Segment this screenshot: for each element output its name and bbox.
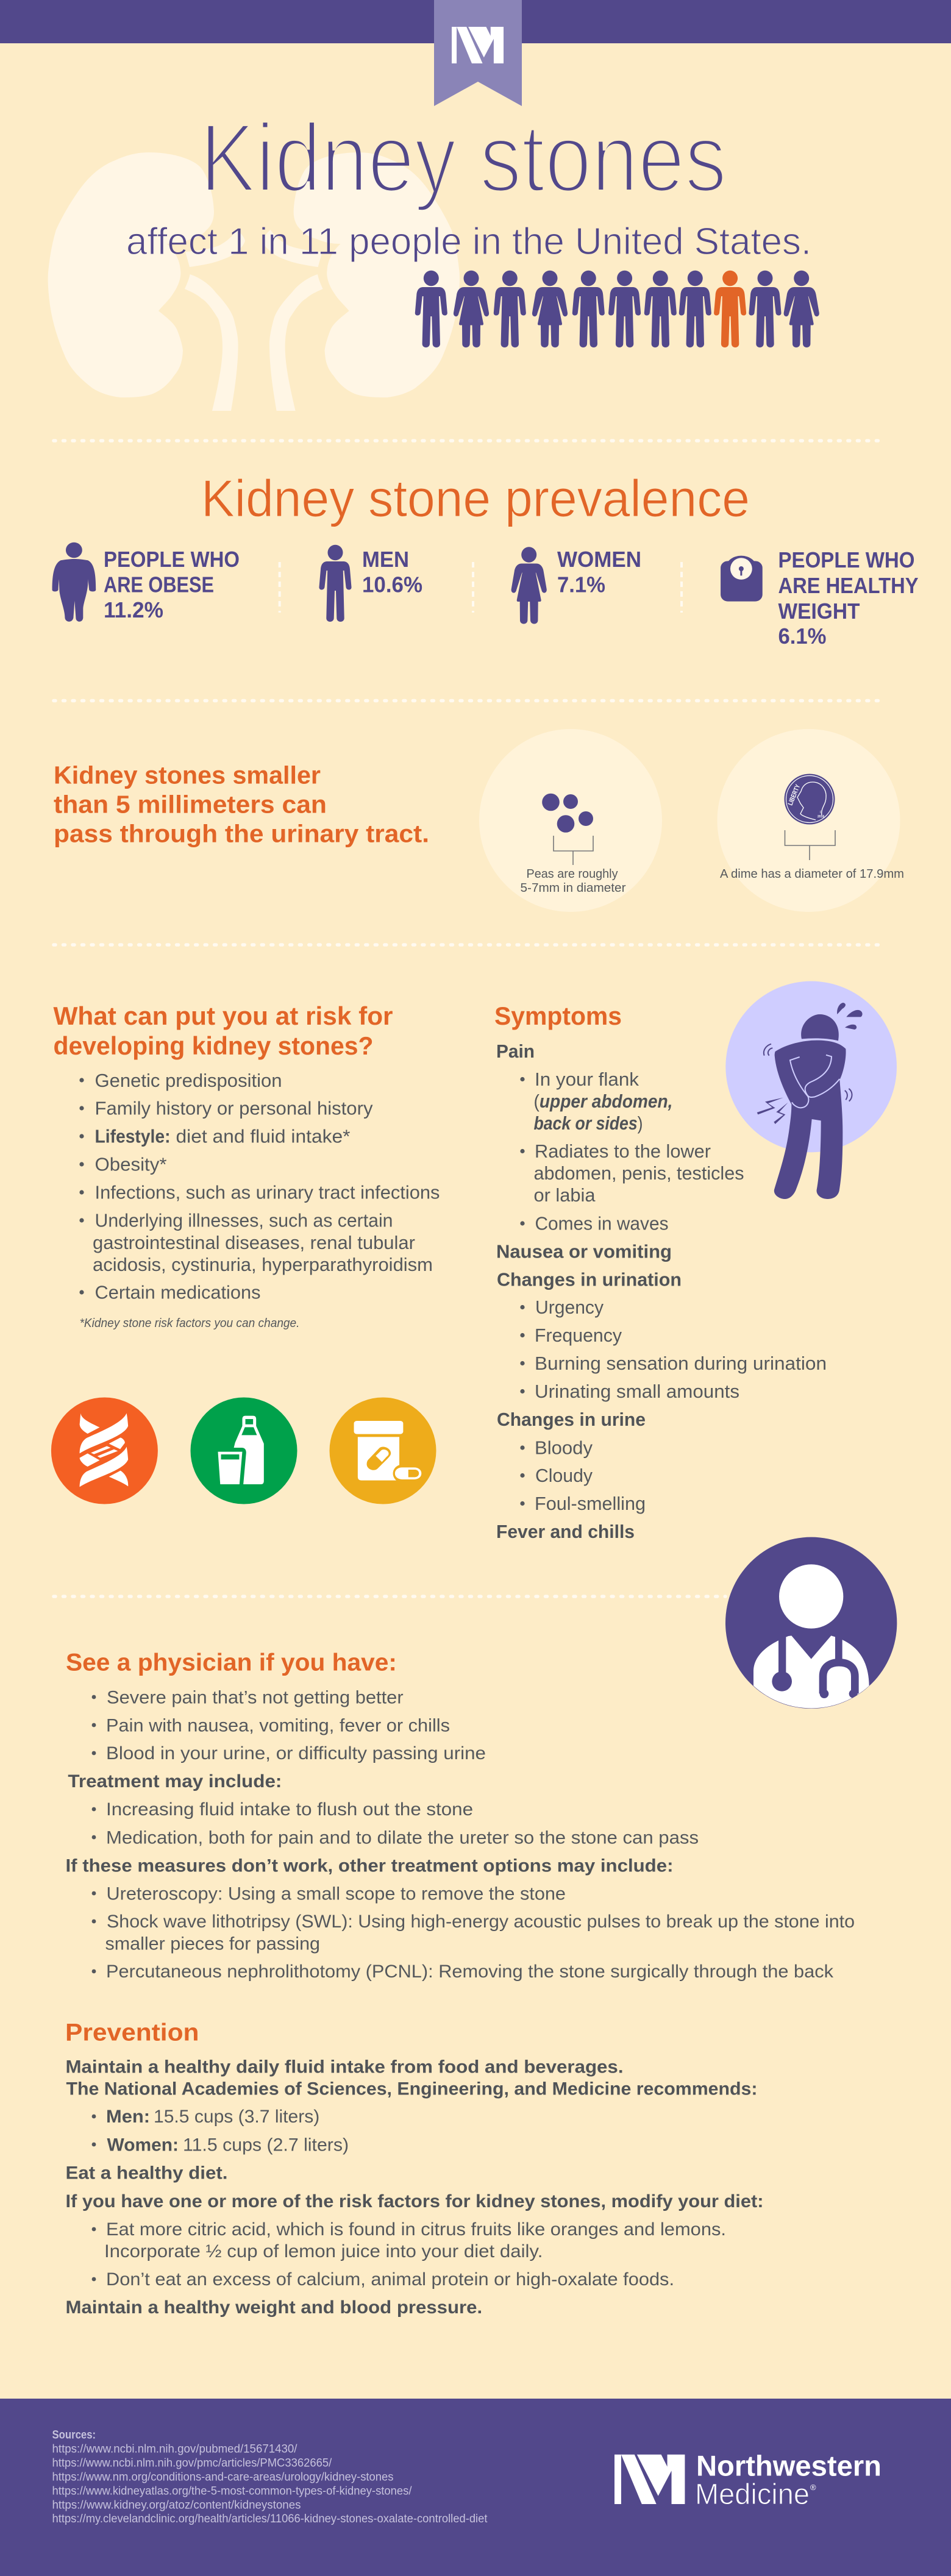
stat: women: 7.1% [557,572,605,597]
list: risk factors: Family history or personal history [95,1098,373,1119]
list: prevention: The National Academies of Sciences, Engineering, and Medicine recommends: [66,2079,757,2099]
list: prevention: 15.5 cups (3.7 liters) [154,2107,319,2127]
list: risk factors: diet and fluid intake* [176,1126,350,1147]
list: symptoms: Fever and chills [496,1521,635,1542]
heading: prevention: Prevention [65,2019,199,2046]
icon: bottle and glass [190,1397,297,1504]
icon: peas [542,794,593,833]
icon: dime [784,774,835,824]
list: physician and treatment: If these measures don’t work, other treatment options may include: [66,1856,673,1876]
list: physician and treatment: Shock wave lithotripsy (SWL): Using high-energy acoustic pulses to break up the stone into [107,1912,855,1932]
panel: peas comparison: 5-7mm in diameter [521,881,626,895]
list: risk factors: Infections, such as urinary tract infections [95,1181,440,1203]
list: prevention: 11.5 cups (2.7 liters) [183,2135,349,2155]
stat: people who are obese [52,543,240,622]
stat: people who are obese: ARE OBESE [104,572,214,597]
icon: kidneys background [48,152,460,411]
list: physician and treatment: Treatment may include: [68,1771,282,1791]
list: risk factors: Lifestyle: [95,1126,171,1147]
icon: dime: 2016 [817,815,824,819]
stat: healthy weight: PEOPLE WHO [778,547,914,572]
list: physician and treatment: Ureteroscopy: Using a small scope to remove the stone [106,1884,566,1904]
list: physician and treatment: Pain with nausea, vomiting, fever or chills [106,1715,450,1735]
list: symptoms: Pain [496,1041,535,1062]
list: symptoms: In your flank [535,1069,639,1090]
icon: scale [721,556,763,602]
stat: healthy weight [721,547,918,649]
panel: dime comparison: A dime has a diameter of 17.9mm [720,867,904,881]
list: prevention: Women: [107,2135,179,2155]
list: symptoms: (upper abdomen, [534,1091,673,1112]
list: symptoms: Radiates to the lower [535,1140,711,1162]
list: physician and treatment [66,1687,855,1982]
list: symptoms: Burning sensation during urination [535,1353,827,1374]
list: risk factors: Obesity* [95,1154,167,1175]
list: physician and treatment: Blood in your urine, or difficulty passing urine [106,1743,486,1763]
list: physician and treatment: Percutaneous nephrolithotomy (PCNL): Removing the stone surgically through the back [106,1962,834,1982]
sources [52,2429,488,2525]
list: physician and treatment: smaller pieces for passing [105,1934,320,1954]
logo: Northwestern Medicine: Northwestern [696,2449,882,2482]
stat: women [511,547,641,624]
stat: people who are obese: PEOPLE WHO [104,547,240,572]
logo: Northwestern Medicine: ® [810,2483,816,2492]
stat: healthy weight: 6.1% [778,624,827,649]
heading: risk factors: What can put you at risk for [54,1002,393,1030]
icon: person in pain [725,981,897,1199]
sources: Sources: [52,2429,96,2442]
stat: healthy weight: ARE HEALTHY [778,573,918,598]
sources: https://www.ncbi.nlm.nih.gov/pmc/articles/PMC3362665/ [52,2457,332,2470]
heading: symptoms: Symptoms [494,1002,622,1030]
list: prevention: Men: [106,2107,150,2127]
ribbon with logo [434,0,522,106]
footer band [0,2399,951,2576]
stat: men [319,545,422,622]
list: symptoms: Frequency [535,1325,622,1346]
sources: https://www.ncbi.nlm.nih.gov/pubmed/15671430/ [52,2443,297,2455]
text: stone size statement [54,761,429,848]
list: prevention: Eat a healthy diet. [66,2163,228,2183]
title: Kidney stones [200,103,727,212]
icon: pill bottle [329,1397,436,1504]
footnote: *Kidney stone risk factors you can change. [79,1317,300,1330]
sources: https://www.nm.org/conditions-and-care-areas/urology/kidney-stones [52,2471,394,2483]
list: symptoms: abdomen, penis, testicles [534,1162,744,1184]
text: stone size statement: pass through the urinary tract. [54,820,429,848]
pictogram: 1 in 11 people [415,271,819,347]
icon: DNA [51,1397,158,1504]
subtitle: affect 1 in 11 people in the United States. [126,221,811,263]
stat: healthy weight: WEIGHT [778,599,860,624]
list: prevention: Maintain a healthy weight and blood pressure. [66,2297,482,2318]
heading: prevalence: Kidney stone prevalence [201,470,750,528]
stat: women: WOMEN [557,547,641,572]
panel: peas comparison: Peas are roughly [527,867,618,881]
list: symptoms: Changes in urination [497,1268,682,1290]
icon: dime: LIBERTY [787,783,802,806]
icon: physician [725,1537,897,1709]
list: risk factors [79,1070,440,1303]
list: prevention: Incorporate ½ cup of lemon juice into your diet daily. [104,2241,543,2261]
list: prevention: If you have one or more of the risk factors for kidney stones, modify your diet: [66,2191,763,2211]
list: symptoms: Urinating small amounts [535,1381,739,1402]
list: symptoms: Urgency [535,1297,604,1318]
stat: people who are obese: 11.2% [104,597,163,622]
list: symptoms: Nausea or vomiting [496,1240,672,1262]
list: physician and treatment: Medication, both for pain and to dilate the ureter so the stone can pass [106,1827,699,1848]
logo: Northwestern Medicine: Medicine [695,2478,810,2511]
icon: dime: D [820,811,822,814]
sources: https://www.kidneyatlas.org/the-5-most-common-types-of-kidney-stones/ [52,2485,412,2498]
list: symptoms: Bloody [535,1437,593,1458]
heading: risk factors [54,1002,393,1060]
list: risk factors: Genetic predisposition [95,1070,282,1091]
list: symptoms: Comes in waves [535,1213,668,1234]
list: risk factors: gastrointestinal diseases, renal tubular [93,1232,415,1253]
logo: Northwestern Medicine [614,2449,882,2511]
list: symptoms [496,1041,827,1542]
text: stone size statement: Kidney stones smaller [54,761,321,789]
list: physician and treatment: Increasing fluid intake to flush out the stone [106,1799,473,1820]
sources: https://my.clevelandclinic.org/health/articles/11066-kidney-stones-oxalate-controlled-diet [52,2513,488,2525]
panel: dime comparison [717,729,904,912]
list: symptoms: back or sides) [534,1112,643,1134]
icon: obese person [52,543,96,622]
text: stone size statement: than 5 millimeters can [54,791,327,819]
list: physician and treatment: Severe pain that’s not getting better [107,1687,404,1707]
stat: men: 10.6% [362,572,422,597]
list: symptoms: Foul-smelling [535,1493,646,1514]
list: prevention: Eat more citric acid, which is found in citrus fruits like oranges and lemons. [106,2219,726,2240]
list: risk factors: Underlying illnesses, such as certain [95,1209,393,1231]
list: prevention: Maintain a healthy daily fluid intake from food and beverages. [66,2057,623,2077]
list: risk factors: Certain medications [95,1281,261,1303]
sources: https://www.kidney.org/atoz/content/kidneystones [52,2499,301,2511]
list: risk factors: acidosis, cystinuria, hyperparathyroidism [93,1254,433,1275]
list: symptoms: Changes in urine [497,1409,646,1430]
header band [0,0,951,43]
panel: peas comparison [479,729,662,912]
list: symptoms: or labia [534,1184,596,1206]
stat: men: MEN [362,547,409,572]
list: symptoms: Cloudy [535,1465,593,1486]
list: prevention: Don’t eat an excess of calcium, animal protein or high-oxalate foods. [106,2269,674,2290]
list: prevention [66,2057,763,2318]
heading: see a physician: See a physician if you have: [66,1649,397,1676]
heading: risk factors: developing kidney stones? [54,1031,373,1060]
